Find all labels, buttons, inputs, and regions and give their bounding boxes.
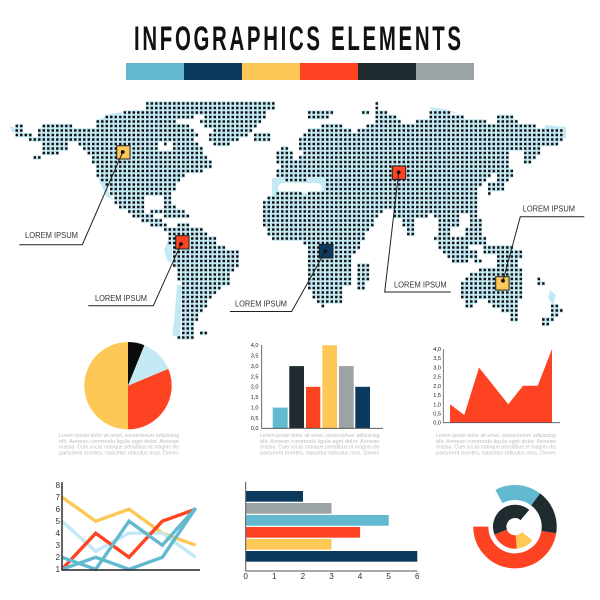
area chart: 0,5 [433,412,441,418]
text block: area chart caption: massa. Cum sociis natoque penatibus et magnis dis [436,444,556,450]
callout: australia [496,205,584,290]
text block: bar chart caption: elit. Aenean commodo ligula eget dolor. Aenean [260,439,380,445]
text block: area chart caption: elit. Aenean commodo ligula eget dolor. Aenean [436,439,556,445]
area chart: 3,0 [433,365,441,371]
line chart: 8 [56,481,60,490]
bar chart: 1,0 [251,406,258,412]
text block: pie caption: elit. Aenean commodo ligula eget dolor. Aenean [59,439,179,445]
line chart: 1 [56,565,60,574]
callout: africa: LOREM IPSUM [235,300,287,309]
area chart: 1,5 [433,393,441,399]
callout: north america [19,146,130,245]
bar chart: 2,5 [251,374,258,380]
text block: bar chart caption: parturient montes, nascetur ridiculus mus. Donec [260,450,380,456]
dotted world map [10,104,566,338]
bar chart: 3,5 [251,354,258,360]
bar chart: 4,0 [251,343,258,349]
line chart: 2 [56,553,60,562]
area chart: 4,0 [433,347,441,353]
text block: area chart caption [436,433,556,456]
bar chart: 3,0 [251,364,258,370]
bar chart: 0,0 [251,426,258,432]
bar chart [251,343,383,432]
callout: north america: LOREM IPSUM [25,231,78,240]
line chart: 6 [56,505,60,514]
text block: area chart caption: Lorem ipsum dolor sit amet, consectetuer adipiscing [436,433,556,439]
bar chart: 1,5 [251,395,258,401]
text block: pie caption [59,433,179,456]
line chart: 5 [56,517,60,526]
colour palette bar [126,63,474,80]
area chart: 0,0 [433,421,441,427]
text block: area chart caption: parturient montes, nascetur ridiculus mus. Donec [436,450,556,456]
text block: pie caption: massa. Cum sociis natoque penatibus et magnis dis [59,444,179,450]
horizontal bar chart: 3 [329,572,334,581]
horizontal bar chart: 0 [243,572,248,581]
text block: pie caption: parturient montes, nascetur ridiculus mus. Donec [59,450,179,456]
horizontal bar chart: 1 [272,572,277,581]
area chart: 2,5 [433,375,441,381]
horizontal bar chart [243,482,420,581]
area chart: 3,5 [433,356,441,362]
horizontal bar chart: 5 [386,572,391,581]
horizontal bar chart: 6 [415,572,420,581]
title: INFOGRAPHICS ELEMENTS [134,20,461,57]
area chart: 1,0 [433,402,441,408]
callout: south america [88,236,189,306]
pie chart [84,342,172,429]
callout: south america: LOREM IPSUM [95,294,147,303]
area chart: 2,0 [433,384,441,390]
text block: pie caption: Lorem ipsum dolor sit amet, consectetuer adipiscing [59,433,179,439]
callout: asia: LOREM IPSUM [394,281,447,290]
bar chart: 0,5 [251,416,258,422]
text block: bar chart caption: massa. Cum sociis natoque penatibus et magnis dis [260,444,380,450]
callout: africa [230,244,333,312]
horizontal bar chart: 4 [358,572,363,581]
line chart: 7 [56,493,60,502]
bar chart: 2,0 [251,385,258,391]
radial donut chart [467,479,563,575]
line chart: 3 [56,541,60,550]
line chart [56,481,200,574]
callout: australia: LOREM IPSUM [523,205,575,214]
horizontal bar chart: 2 [301,572,306,581]
text block: bar chart caption [260,433,380,456]
callout: asia [385,166,451,292]
line chart: 4 [56,529,60,538]
text block: bar chart caption: Lorem ipsum dolor sit amet, consectetuer adipiscing [260,433,380,439]
area chart [433,347,560,427]
